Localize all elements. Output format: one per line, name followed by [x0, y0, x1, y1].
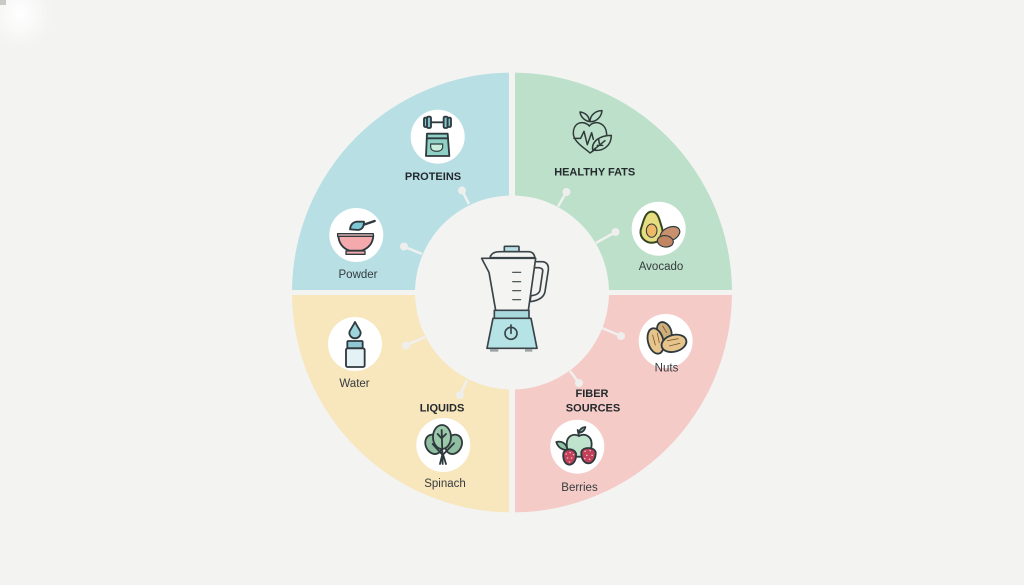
icon: dumbbell and protein bag: [411, 110, 465, 164]
heading: liquids: LIQUIDS: [420, 402, 464, 414]
label: powder: Powder: [338, 269, 378, 281]
heading: healthy fats: HEALTHY FATS: [554, 166, 635, 178]
icon: nuts: [639, 314, 693, 368]
quadrant: proteins: [292, 73, 509, 290]
icon: powder scoop and bowl: [329, 208, 383, 262]
panel: liquids: [292, 295, 509, 512]
label: water: Water: [339, 378, 370, 390]
panel: healthy fats: [515, 73, 732, 290]
panel: proteins: [292, 73, 509, 290]
connector: liquids heading: [456, 380, 467, 399]
icon: apple and berries: [550, 420, 604, 474]
heading: fiber sources: [566, 388, 620, 414]
icon: avocado and almonds: [632, 202, 686, 256]
heading: fiber sources: FIBER: [576, 388, 609, 400]
connector: proteins heading: [458, 186, 469, 204]
heading: proteins: PROTEINS: [405, 171, 461, 183]
connector: powder: [400, 242, 422, 254]
connector: water: [402, 337, 425, 350]
connector: fiber sources heading: [570, 371, 583, 387]
heading: fiber sources: SOURCES: [566, 402, 620, 414]
icon: heart with pulse and leaves: [573, 111, 611, 153]
quadrant: fiber sources: [515, 295, 732, 512]
icon: central blender: [482, 246, 548, 352]
icon: water drop and bottle: [328, 317, 382, 371]
panel: fiber sources: [515, 295, 732, 512]
quadrant: healthy fats: [515, 73, 732, 290]
label: spinach: Spinach: [424, 478, 466, 490]
icon: spinach: [416, 418, 470, 472]
quadrant: liquids: [292, 295, 509, 512]
connector: avocado: [596, 228, 620, 243]
connector: healthy fats heading: [558, 188, 570, 206]
label: berries: Berries: [561, 482, 598, 494]
label: nuts: Nuts: [655, 362, 679, 374]
connector: nuts: [602, 328, 625, 340]
label: avocado: Avocado: [639, 261, 683, 273]
